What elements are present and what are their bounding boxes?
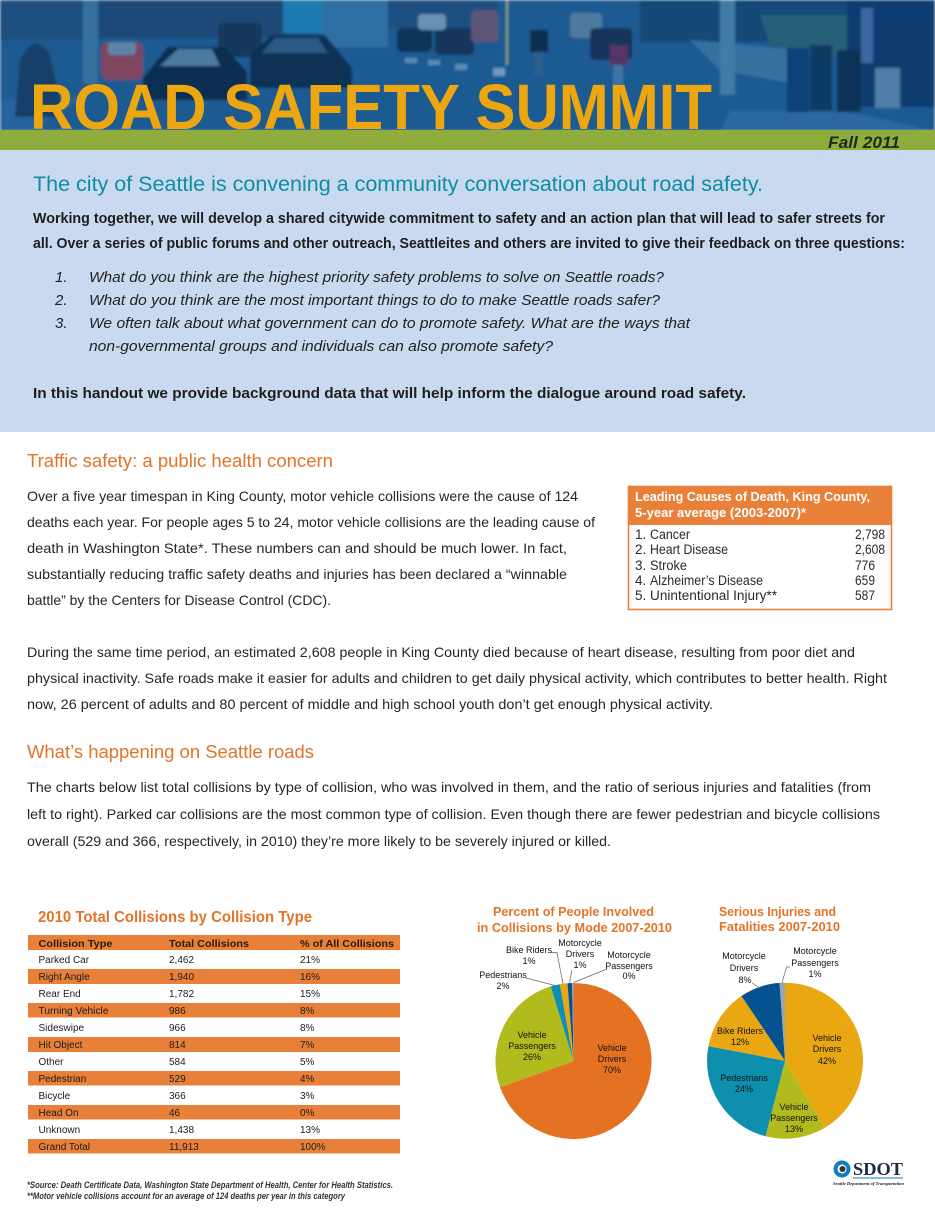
- pie chart: serious injuries and fatalities: 42%: [818, 1056, 836, 1066]
- table: collisions by type: Hit Object: [38, 1040, 83, 1051]
- pie chart: serious injuries and fatalities: 12%: [731, 1037, 749, 1047]
- table: collisions by type: 366: [169, 1091, 186, 1102]
- pie chart: people involved by mode: Passengers: [508, 1041, 556, 1051]
- pie chart: people involved by mode: Vehicle: [517, 1030, 547, 1040]
- table: collisions by type: 529: [169, 1074, 186, 1085]
- text block: traffic safety paragraph 1: [27, 488, 595, 608]
- SDOT logo: Seattle Department of Transportation: [833, 1181, 904, 1186]
- table: collisions by type: 584: [169, 1057, 186, 1068]
- pie chart: people involved by mode: 26%: [523, 1052, 541, 1062]
- ranked list: 4.: [635, 573, 646, 588]
- pie chart: people involved by mode: 2%: [496, 981, 510, 991]
- ranked list: Heart Disease: [650, 542, 728, 557]
- ranked list: 776: [855, 558, 875, 573]
- footnotes: [27, 1180, 393, 1201]
- table: collisions by type: Pedestrian: [38, 1074, 86, 1085]
- table: collisions by type: 3%: [300, 1091, 315, 1102]
- numbered questions: 1.: [55, 269, 68, 286]
- panel heading: 5-year average (2003-2007)*: [635, 505, 807, 520]
- pie chart: serious injuries and fatalities: Motorcycle: [793, 946, 837, 956]
- table: collisions by type: 814: [169, 1040, 186, 1051]
- ranked list: 3.: [635, 558, 646, 573]
- pie chart: serious injuries and fatalities: Passengers: [770, 1113, 818, 1123]
- table: collisions by type: Turning Vehicle: [38, 1006, 109, 1017]
- text block: traffic safety paragraph 1: Over a five year timespan in King County, motor vehicle collisions were the cause of 124: [27, 488, 578, 504]
- pie chart: serious injuries and fatalities: 1%: [808, 969, 822, 979]
- panel heading: [635, 489, 870, 520]
- SDOT logo: [833, 1159, 904, 1186]
- text block: traffic safety paragraph 1: death in Washington State*. These numbers can and should be much lower. In fact,: [27, 540, 567, 556]
- numbered questions: 3.: [55, 315, 68, 332]
- table: collisions by type: 1,438: [169, 1125, 194, 1136]
- pie chart title: people involved: [477, 905, 672, 935]
- table: collisions by type: Other: [38, 1057, 64, 1068]
- ranked list: 659: [855, 573, 875, 588]
- pie chart: serious injuries and fatalities: Vehicle: [812, 1033, 842, 1043]
- pie chart: people involved by mode: 1%: [522, 956, 536, 966]
- table: collisions by type: 15%: [300, 989, 320, 1000]
- ranked list: 2,798: [855, 527, 885, 542]
- text block: Seattle roads paragraph: left to right). Parked car collisions are the most common type of collision. Even though there are fewer pedestrian and bicycle collisions: [27, 806, 880, 822]
- numbered questions: [54, 269, 691, 355]
- panel: leading causes of death: [628, 486, 892, 610]
- table: collisions by type: 1,940: [169, 972, 194, 983]
- heading: Seattle roads: What’s happening on Seattle roads: [27, 742, 314, 762]
- table: collisions by type: 100%: [300, 1142, 326, 1153]
- pie chart: people involved by mode: 1%: [573, 960, 587, 970]
- table: collisions by type: 2,462: [169, 955, 194, 966]
- text block: traffic safety paragraph 1: battle” by the Centers for Disease Control (CDC).: [27, 592, 331, 608]
- table: collisions by type: 8%: [300, 1006, 315, 1017]
- intro paragraph: [33, 210, 905, 252]
- table: collisions by type: % of All Collisions: [300, 938, 394, 950]
- text block: traffic safety paragraph 2: During the same time period, an estimated 2,608 people in King County died because of heart disease, resulting from poor diet and: [27, 644, 855, 660]
- pie chart: people involved by mode: 0%: [622, 971, 636, 981]
- pie chart: people involved by mode: 70%: [603, 1065, 621, 1075]
- intro heading: The city of Seattle is convening a community conversation about road safety.: [33, 173, 763, 196]
- pie chart: people involved by mode: Bike Riders: [506, 945, 553, 955]
- pie chart: serious injuries and fatalities: Pedestrians: [720, 1073, 768, 1083]
- pie chart: people involved by mode: Motorcycle: [558, 938, 602, 948]
- text block: traffic safety paragraph 1: substantially reducing traffic safety deaths and injuries has been declared a “winnable: [27, 566, 567, 582]
- table: collisions by type: 46: [169, 1108, 181, 1119]
- green band: [0, 130, 935, 150]
- pie chart: serious injuries and fatalities: 8%: [738, 975, 752, 985]
- title: ROAD SAFETY SUMMIT: [30, 71, 712, 143]
- pie chart: people involved by mode: Pedestrians: [479, 970, 527, 980]
- table: collisions by type: 1,782: [169, 989, 194, 1000]
- table: collisions by type: 4%: [300, 1074, 315, 1085]
- table heading: 2010 Total Collisions by Collision Type: [38, 909, 312, 926]
- table: collisions by type: Rear End: [38, 989, 81, 1000]
- text block: Seattle roads paragraph: The charts below list total collisions by type of collision, who was involved in them, and the ratio of serious injuries and fatalities (from: [27, 779, 871, 795]
- table: collisions by type: Head On: [38, 1108, 79, 1119]
- pie chart title: people involved: in Collisions by Mode 2007-2010: [477, 921, 672, 935]
- intro paragraph: all. Over a series of public forums and other outreach, Seattleites and others are invited to give their feedback on three questions:: [33, 235, 905, 252]
- pie chart title: serious injuries: Fatalities 2007-2010: [719, 920, 840, 934]
- table: collisions by type: 11,913: [169, 1142, 199, 1153]
- numbered questions: We often talk about what government can do to promote safety. What are the ways that: [89, 315, 691, 332]
- pie chart: people involved by mode: Passengers: [605, 961, 653, 971]
- pie chart: people involved by mode: Drivers: [566, 949, 595, 959]
- table: collisions by type: Bicycle: [38, 1091, 71, 1102]
- ranked list: Stroke: [650, 558, 687, 573]
- ranked list: 2.: [635, 542, 646, 557]
- text block: traffic safety paragraph 2: [27, 644, 887, 712]
- pie chart: people involved by mode: [479, 938, 653, 1139]
- table: collisions by type: 16%: [300, 972, 320, 983]
- pie chart: people involved by mode: Drivers: [598, 1054, 627, 1064]
- ranked list: 587: [855, 588, 875, 603]
- intro paragraph: Working together, we will develop a shared citywide commitment to safety and an action plan that will lead to safer streets for: [33, 210, 885, 227]
- handout statement: In this handout we provide background data that will help inform the dialogue around road safety.: [33, 385, 746, 402]
- table: collisions by type: 13%: [300, 1125, 320, 1136]
- ranked list: 2,608: [855, 542, 885, 557]
- pie chart: serious injuries and fatalities: Bike Riders: [717, 1026, 764, 1036]
- table: collisions by type: 21%: [300, 955, 320, 966]
- table: collisions by type: 966: [169, 1023, 186, 1034]
- panel heading: Leading Causes of Death, King County,: [635, 489, 870, 504]
- numbered questions: 2.: [54, 292, 68, 309]
- pie chart: serious injuries and fatalities: Passengers: [791, 958, 839, 968]
- ranked list: [635, 527, 885, 603]
- table: collisions by type: Total Collisions: [169, 938, 249, 950]
- text block: traffic safety paragraph 2: now, 26 percent of adults and 80 percent of middle and high school youth don’t get enough physical activity.: [27, 696, 713, 712]
- pie chart: serious injuries and fatalities: Drivers: [730, 963, 759, 973]
- edition date: Fall 2011: [828, 133, 900, 152]
- text block: Seattle roads paragraph: overall (529 and 366, respectively, in 2010) they’re more likely to be severely injured or killed.: [27, 833, 611, 849]
- pie chart: serious injuries and fatalities: Motorcycle: [722, 951, 766, 961]
- table: collisions by type: 986: [169, 1006, 186, 1017]
- table: collisions by type: Grand Total: [38, 1142, 90, 1153]
- pie chart: people involved by mode: Vehicle: [597, 1043, 627, 1053]
- table: collisions by type: Unknown: [38, 1125, 80, 1136]
- header photo: street scene with blue overlay: [0, 0, 935, 131]
- table: collisions by type: Right Angle: [38, 972, 90, 983]
- pie chart: serious injuries and fatalities: 24%: [735, 1084, 753, 1094]
- table: collisions by type: Collision Type: [38, 938, 113, 950]
- ranked list: 1.: [635, 527, 646, 542]
- pie chart title: serious injuries: [719, 905, 840, 934]
- table: collisions by type: Parked Car: [38, 955, 90, 966]
- table: collisions by type: 5%: [300, 1057, 315, 1068]
- table: collisions by type: 0%: [300, 1108, 315, 1119]
- pie chart: serious injuries and fatalities: [707, 946, 863, 1139]
- footnotes: **Motor vehicle collisions account for an average of 124 deaths per year in this category: [27, 1191, 346, 1201]
- ranked list: 5.: [635, 588, 646, 603]
- text block: traffic safety paragraph 1: deaths each year. For people ages 5 to 24, motor vehicle collisions are the leading cause of: [27, 514, 595, 530]
- numbered questions: What do you think are the most important things to do to make Seattle roads safer?: [89, 292, 661, 309]
- text block: traffic safety paragraph 2: physical inactivity. Safe roads make it easier for adults and children to get daily physical activity, which contributes to better health. Right: [27, 670, 887, 686]
- table: collisions by type: 7%: [300, 1040, 315, 1051]
- pie chart title: serious injuries: Serious Injuries and: [719, 905, 836, 919]
- pie chart: serious injuries and fatalities: 13%: [785, 1124, 803, 1134]
- pie chart: people involved by mode: Motorcycle: [607, 950, 651, 960]
- table: collisions by type: Sideswipe: [38, 1023, 85, 1034]
- pie chart: serious injuries and fatalities: Drivers: [813, 1044, 842, 1054]
- footnotes: *Source: Death Certificate Data, Washington State Department of Health, Center for Health Statistics.: [27, 1180, 393, 1190]
- ranked list: Unintentional Injury**: [650, 588, 778, 603]
- numbered questions: non-governmental groups and individuals can also promote safety?: [89, 338, 554, 355]
- pie chart title: people involved: Percent of People Involved: [493, 905, 654, 919]
- table: collisions by type: 8%: [300, 1023, 315, 1034]
- SDOT logo: SDOT: [853, 1159, 903, 1179]
- pie chart: serious injuries and fatalities: Vehicle: [779, 1102, 809, 1112]
- panel: introduction: [0, 150, 935, 432]
- text block: Seattle roads paragraph: [27, 779, 880, 849]
- table: collisions by type: [28, 935, 400, 1154]
- ranked list: Alzheimer’s Disease: [650, 573, 763, 588]
- numbered questions: What do you think are the highest priority safety problems to solve on Seattle roads?: [89, 269, 665, 286]
- heading: traffic safety: Traffic safety: a public health concern: [27, 451, 333, 471]
- ranked list: Cancer: [650, 527, 690, 542]
